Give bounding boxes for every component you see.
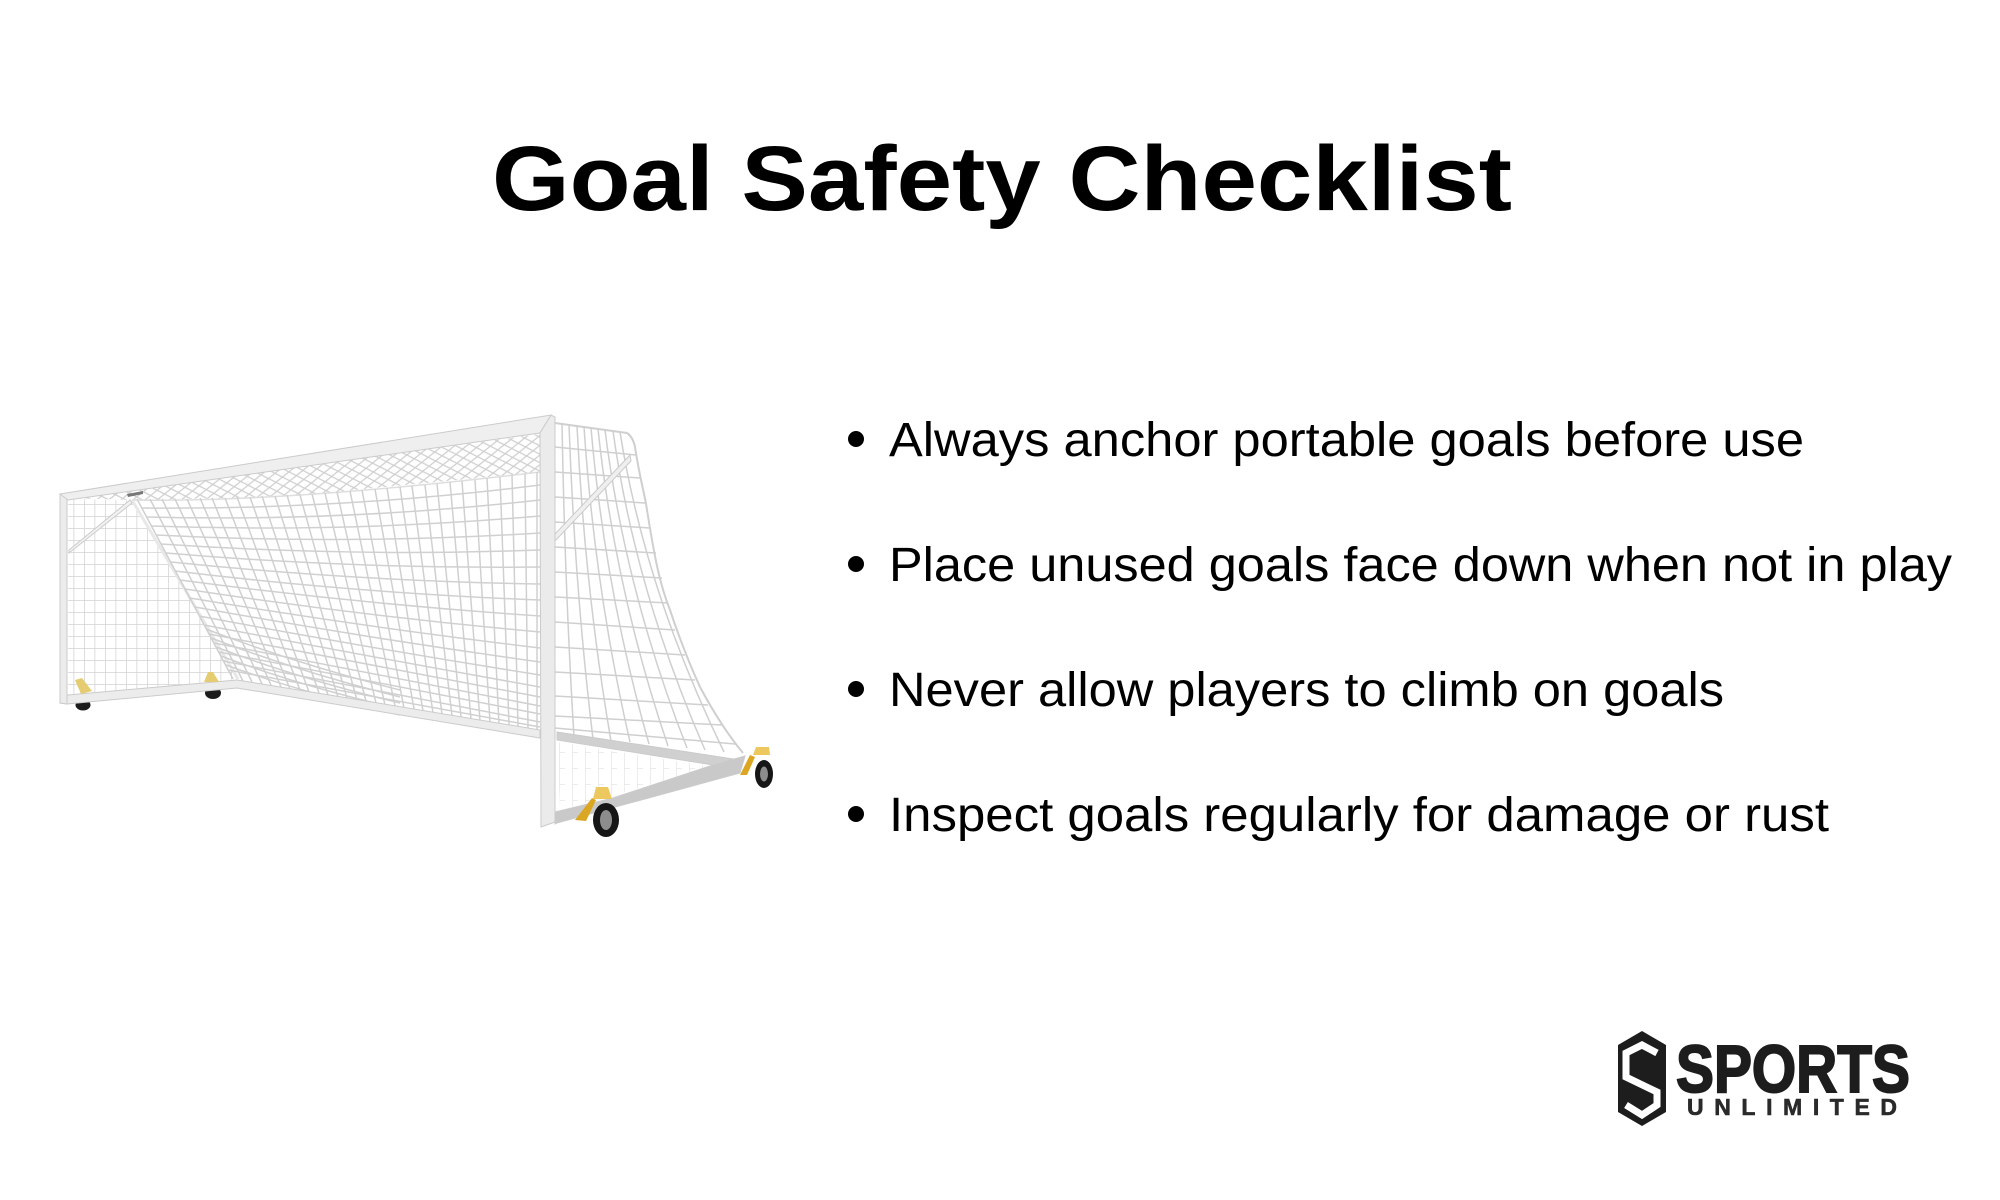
net: left side panel and roof — [68, 434, 540, 695]
net: hanging below rear bar — [557, 742, 712, 810]
item: anchor goals: Always anchor portable goals before use — [889, 414, 1804, 467]
item: no climbing: Never allow players to climb on goals — [889, 664, 1724, 717]
left rear small wheels — [76, 687, 221, 710]
logo subline: UNLIMITED — [1687, 1094, 1897, 1120]
front wheels — [593, 760, 773, 837]
title: Goal Safety Checklist — [492, 128, 1512, 230]
logo: Sports Unlimited — [1618, 1031, 1910, 1126]
net: back panel — [137, 472, 540, 730]
goal frame — [60, 415, 745, 827]
yellow anchor brackets — [75, 672, 770, 821]
net: right side panel — [555, 423, 743, 753]
logo wordmark: SPORTS — [1676, 1032, 1910, 1107]
checklist — [848, 414, 1952, 842]
item: inspect: Inspect goals regularly for damage or rust — [889, 789, 1829, 842]
soccer goal illustration — [60, 415, 773, 837]
item: face down: Place unused goals face down when not in play — [889, 539, 1952, 592]
logo icon: S hexagon — [1618, 1031, 1666, 1126]
